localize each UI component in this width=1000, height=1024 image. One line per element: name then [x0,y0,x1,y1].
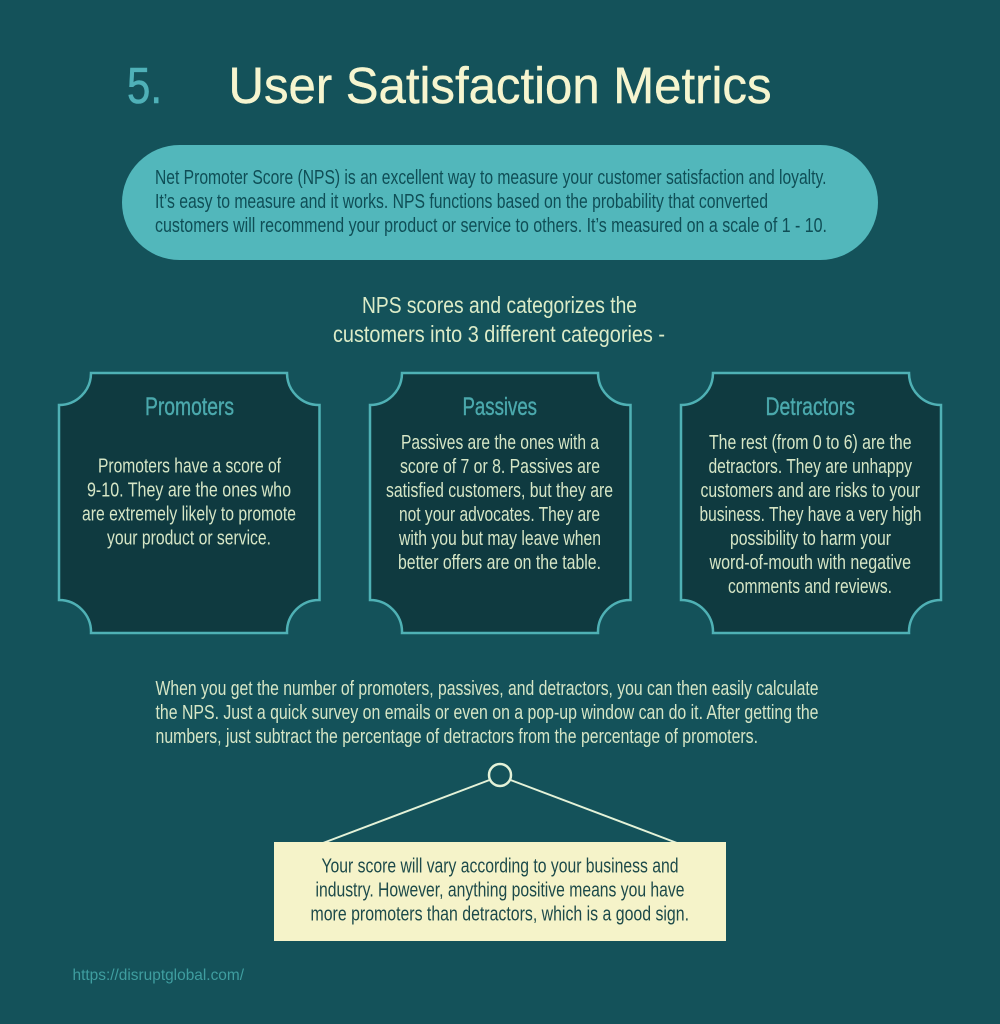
text: detractors description [700,432,922,598]
heading: detractors: Detractors [766,393,855,421]
panel: promoters [59,373,320,633]
text: detractors description: possibility to harm your [730,528,891,550]
text: passives description: score of 7 or 8. Passives are [400,456,600,478]
text: promoters description: 9-10. They are the ones who [87,480,291,502]
source link: https://disruptglobal.com/ [72,967,245,984]
text block: how to calculate NPS: the NPS. Just a quick survey on emails or even on a pop-up window can do it. After getting the [156,702,818,724]
text: promoters description: your product or service. [107,528,271,550]
text: detractors description: business. They have a very high [700,504,922,526]
text block: how to calculate NPS: numbers, just subtract the percentage of detractors from the percentage of promoters. [156,726,758,748]
text: passives description: satisfied customers, but they are [386,480,613,502]
text: passives description: not your advocates. They are [399,504,600,526]
text block: categories intro: NPS scores and categorizes the [362,292,637,318]
text: passives description: better offers are on the table. [398,552,601,574]
icon: hanging sign hook and strings [323,764,677,843]
text: detractors description: The rest (from 0 to 6) are the [709,432,912,454]
text: detractors description: customers and are risks to your [700,480,920,502]
callout: score interpretation: industry. However, anything positive means you have [316,880,684,902]
text block: how to calculate NPS: When you get the number of promoters, passives, and detractors, you can then easily calculate [156,678,818,700]
panel: NPS introduction [122,145,878,260]
section number: 5. [127,57,162,114]
panel: passives [370,373,630,633]
text block: categories intro [333,292,665,347]
heading: promoters: Promoters [145,393,234,421]
text: promoters description [82,456,296,550]
text: promoters description: Promoters have a score of [98,456,281,478]
callout: score interpretation: more promoters than detractors, which is a good sign. [310,904,689,926]
panel: NPS introduction: Net Promoter Score (NPS) is an excellent way to measure your customer satisfaction and loyalty. [155,167,826,189]
callout: score interpretation: Your score will vary according to your business and [322,856,678,878]
text: detractors description: word-of-mouth with negative [709,552,911,574]
heading: passives: Passives [462,393,537,421]
text: promoters description: are extremely likely to promote [82,504,296,526]
text block: how to calculate NPS [156,678,818,748]
panel: detractors [681,373,941,633]
panel: NPS introduction: customers will recommend your product or service to others. It’s measured on a scale of 1 - 10. [155,215,827,237]
text: passives description: with you but may leave when [398,528,601,550]
title text: User Satisfaction Metrics [228,57,772,114]
text block: categories intro: customers into 3 different categories - [333,321,665,347]
text: detractors description: detractors. They are unhappy [708,456,912,478]
panel: NPS introduction: It’s easy to measure and it works. NPS functions based on the probability that converted [155,191,768,213]
text: passives description [386,432,613,574]
title [127,57,772,114]
text: detractors description: comments and reviews. [728,576,892,598]
callout: score interpretation [274,842,726,941]
text: passives description: Passives are the ones with a [401,432,600,454]
